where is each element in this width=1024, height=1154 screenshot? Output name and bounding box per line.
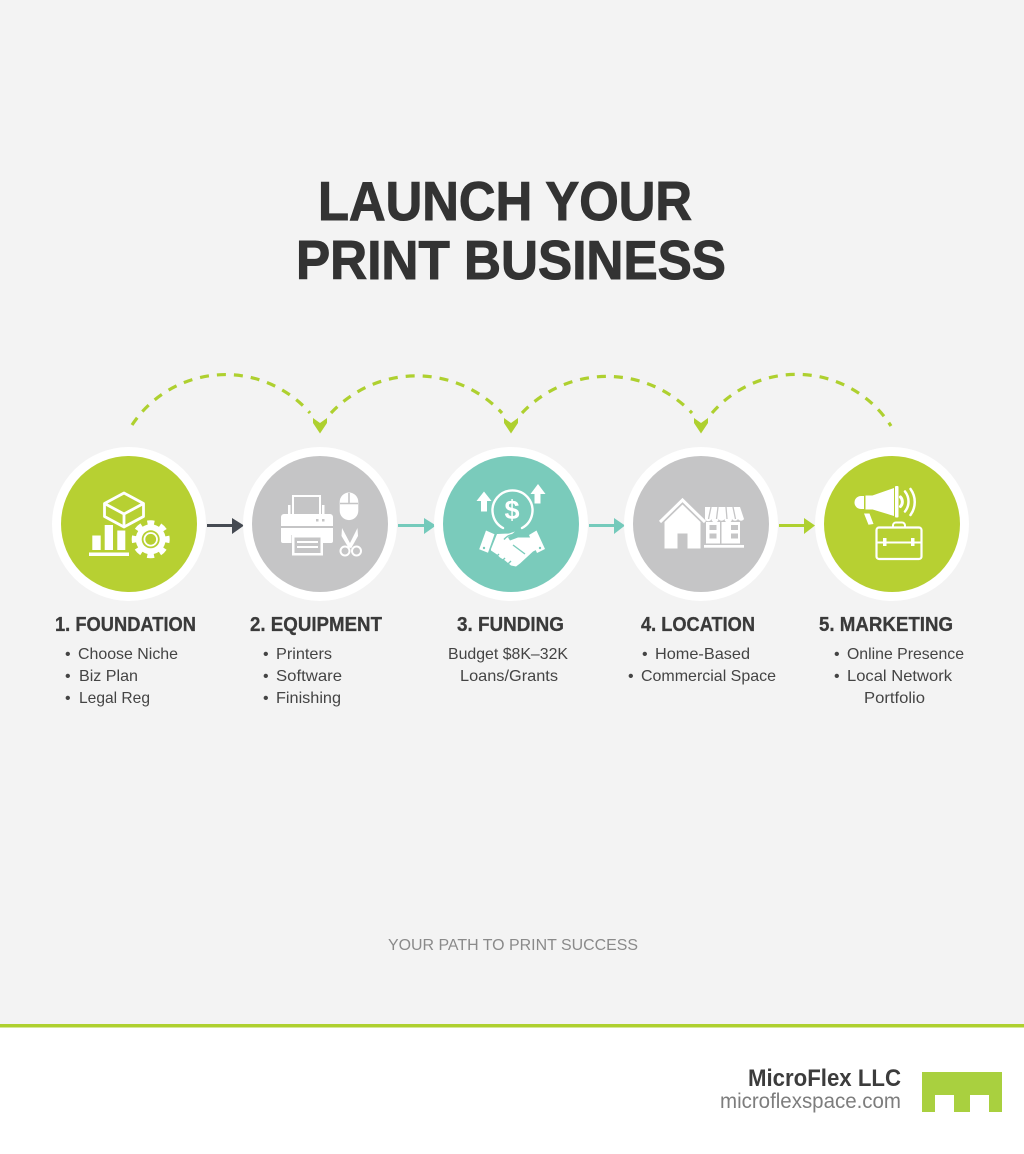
step 2 circle: equipment [243,447,397,601]
text: step 1: 1. FOUNDATION [55,614,196,636]
arrow 3 to 4 [589,518,625,534]
step 1 circle: foundation [52,447,206,601]
text: step 2: Printers [276,646,332,663]
text: step 2: 2. EQUIPMENT [250,614,382,636]
icon: dollar, arrows and handshake: $ [504,495,520,525]
text: step 1: Legal Reg [79,690,150,707]
text: step 2: • [263,690,269,707]
step 3 circle: funding [434,447,588,601]
icon: megaphone and briefcase [855,486,922,559]
text: step 3: 3. FUNDING [457,614,564,636]
text: step 1 [55,614,196,707]
step 4 circle: location [624,447,778,601]
text: step 5: Portfolio [864,690,925,707]
text: step 5 [819,614,964,707]
title: PRINT BUSINESS [296,229,726,291]
tagline: YOUR PATH TO PRINT SUCCESS [388,937,638,954]
company name: MicroFlex LLC [748,1065,901,1092]
text: step 5: Local Network [847,668,953,685]
icon: printer, mouse and scissors [281,492,361,556]
text: step 1: Choose Niche [78,646,178,663]
footer band [0,1024,1024,1154]
text: step 5: • [834,646,840,663]
text: step 1: • [65,690,71,707]
text: step 4: 4. LOCATION [641,614,755,636]
text: step 2: Finishing [276,690,341,707]
text: step 5: • [834,668,840,685]
text: step 2: Software [276,668,342,685]
logo [922,1072,1002,1112]
text: step 4: • [642,646,648,663]
arrow 1 to 2 [207,518,244,534]
text: step 1: • [65,668,71,685]
title [296,170,726,291]
arrow 2 to 3 [398,518,436,534]
text: step 3: Budget $8K–32K [448,646,568,663]
text: step 2 [250,614,382,707]
text: step 5: 5. MARKETING [819,614,953,636]
text: step 3: Loans/Grants [460,668,558,685]
website: microflexspace.com [720,1090,901,1113]
text: step 5: Online Presence [847,646,964,663]
text: step 1: Biz Plan [79,668,138,685]
text: step 4: Home-Based [655,646,750,663]
step 5 circle: marketing [815,447,969,601]
arrowheads on dashed arcs [313,418,708,434]
icon: cube, bars and gear [89,493,167,556]
text: step 4: Commercial Space [641,668,776,685]
title: LAUNCH YOUR [318,170,692,232]
text: step 1: • [65,646,71,663]
text: step 4 [628,614,776,685]
text: step 2: • [263,668,269,685]
text: step 3 [448,614,568,685]
text: step 2: • [263,646,269,663]
icon: house and storefront [660,500,744,548]
arrow 4 to 5 [779,518,815,534]
text: step 4: • [628,668,634,685]
dashed arcs connecting the steps [132,374,891,426]
icon: dollar, arrows and handshake [476,484,546,566]
